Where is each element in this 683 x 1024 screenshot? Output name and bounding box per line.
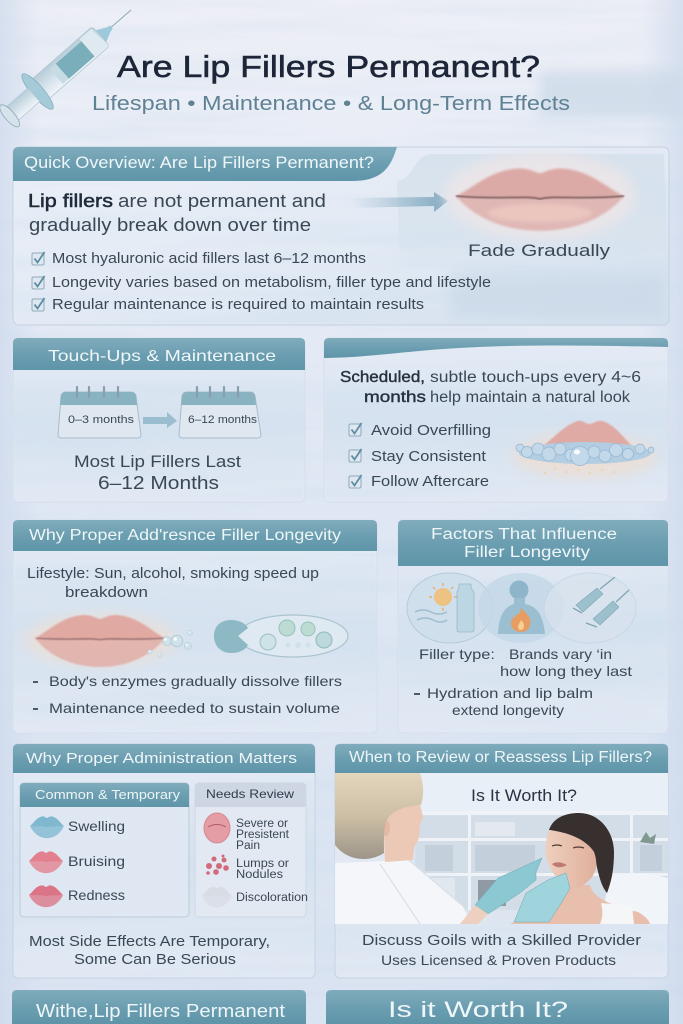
- text: lifestyle: Lifestyle: Sun, alcohol, smoking speed up: [27, 566, 319, 582]
- item: severe pain: Severe or: [236, 818, 288, 830]
- label: fade gradually: Fade Gradually: [468, 241, 611, 260]
- caption: most lip fillers last: Most Lip Fillers Last: [74, 452, 241, 471]
- lead text: Lip fillers: [28, 191, 113, 211]
- sub-panel: needs review: [195, 783, 308, 917]
- nurse: [335, 860, 472, 924]
- image: lips dissolving: [24, 614, 193, 667]
- bullets: enzymes and maintenance: [33, 673, 342, 716]
- checklist: [32, 251, 491, 313]
- heading: quick overview: Quick Overview: Are Lip Fillers Permanent?: [24, 154, 374, 172]
- checklist: touch-up tips: Avoid Overfilling: [371, 423, 491, 439]
- caption: side effects: [29, 934, 270, 968]
- text: scheduled touch-ups: subtle touch-ups every 4~6: [430, 369, 641, 386]
- panel: quick overview: [13, 147, 669, 325]
- panel: proper administration: [13, 744, 315, 978]
- bullets: enzymes and maintenance: Maintenance needed to sustain volume: [49, 700, 340, 716]
- banner: lip fillers permanent: [12, 990, 306, 1024]
- text: hydration: Hydration and lip balm: [427, 685, 593, 701]
- icon: syringes: [544, 573, 636, 643]
- text: lifestyle: breakdown: [65, 585, 148, 601]
- patient: [510, 885, 650, 924]
- image: lips: [444, 152, 636, 240]
- caption: discuss goals: Discuss Goils with a Skilled Provider: [362, 932, 641, 949]
- subtitle: Lifespan • Maintenance • & Long-Term Effects: [92, 92, 570, 115]
- lead text: gradually break down over time: [29, 215, 311, 235]
- checklist: touch-up tips: [349, 423, 491, 490]
- heading: proper administration: [13, 744, 315, 773]
- gloves: [475, 858, 542, 914]
- caption: most lip fillers last: [74, 452, 241, 493]
- heading: touch-ups: [13, 338, 305, 370]
- lead text: [28, 191, 326, 235]
- text: scheduled touch-ups: [340, 369, 641, 406]
- icon: calendar 0-3 months: [58, 387, 141, 438]
- checklist: Regular maintenance is required to maintain results: [52, 297, 424, 313]
- heading: factors: Filler Longevity: [464, 544, 590, 561]
- icon: syringe: [0, 0, 146, 136]
- heading: quick overview: [13, 147, 397, 181]
- label: is it worth it: Is It Worth It?: [471, 786, 577, 805]
- text: filler type: how long they last: [500, 663, 632, 679]
- heading: when to review: When to Review or Reassess Lip Fillers?: [349, 749, 652, 766]
- item: discoloration: Discoloration: [236, 892, 308, 904]
- text: filler type: Brands vary ‘in: [509, 646, 612, 662]
- item: swelling: [30, 816, 125, 838]
- lead text: are not permanent and: [118, 191, 326, 211]
- bullets: enzymes and maintenance: Body's enzymes gradually dissolve fillers: [49, 673, 342, 689]
- arrow: calendar progression: [143, 412, 177, 428]
- heading: factors: Factors That Influence: [431, 526, 617, 543]
- panel: filler breakdown: [13, 520, 377, 733]
- arrow: [350, 192, 448, 212]
- text: filler type: Filler type:: [419, 646, 495, 662]
- sub-panel: needs review: Needs Review: [206, 787, 294, 801]
- item: redness: Redness: [68, 887, 125, 903]
- item: swelling: Swelling: [68, 818, 125, 834]
- checklist: touch-up tips: Stay Consistent: [371, 449, 486, 465]
- checklist: touch-up tips: Follow Aftercare: [371, 474, 489, 490]
- item: redness: [29, 885, 125, 907]
- banner: is it worth it: [326, 990, 669, 1024]
- icon: calendar 0-3 months: 0–3 months: [68, 414, 135, 426]
- item: bruising: [29, 851, 125, 873]
- banner: lip fillers permanent: Withe,Lip Fillers Permanent: [36, 1001, 285, 1021]
- icon: enzyme and filler capsule: [214, 615, 348, 657]
- caption: side effects: Some Can Be Serious: [74, 952, 236, 968]
- heading: proper administration: Why Proper Administration Matters: [26, 750, 297, 767]
- caption: side effects: Most Side Effects Are Temporary,: [29, 934, 270, 950]
- panel: factors: [398, 520, 668, 733]
- photo: provider examining patient: [335, 773, 668, 924]
- item: bruising: Bruising: [68, 853, 125, 869]
- item: severe pain: [204, 813, 290, 852]
- text: filler type: [419, 646, 632, 679]
- banner: is it worth it: Is it Worth It?: [388, 997, 568, 1022]
- caption: most lip fillers last: 6–12 Months: [98, 473, 219, 493]
- heading: filler longevity: Why Proper Add'resnce Filler Longevity: [29, 527, 341, 544]
- sub-panel: common and temporary: [20, 783, 189, 917]
- heading: filler longevity: [13, 520, 377, 551]
- text: scheduled touch-ups: months: [364, 389, 426, 406]
- decorative wave header: [324, 338, 668, 358]
- panel: scheduled touch-ups: [324, 338, 668, 502]
- panel: touch-ups and maintenance: [13, 338, 305, 502]
- icon: calendar 6-12 months: 6–12 months: [188, 414, 258, 426]
- item: severe pain: Pain: [236, 840, 260, 852]
- heading: when to review: [335, 744, 668, 773]
- panel: when to review: [335, 744, 668, 978]
- text: hydration: [414, 685, 593, 718]
- item: lumps: Lumps or: [236, 858, 289, 870]
- item: lumps: Nodules: [236, 869, 283, 881]
- icon: calendar 6-12 months: [179, 387, 261, 438]
- text: hydration: extend longevity: [452, 702, 564, 718]
- title: Are Lip Fillers Permanent?: [117, 49, 540, 84]
- item: severe pain: Presistent: [236, 829, 290, 841]
- icon: body with flame: [478, 573, 564, 643]
- image: lips with filler bubbles: [513, 421, 657, 478]
- heading: factors: [398, 520, 668, 566]
- heading: touch-ups: Touch-Ups & Maintenance: [48, 348, 276, 365]
- text: scheduled touch-ups: help maintain a natural look: [430, 389, 630, 406]
- caption: discuss goals: [362, 932, 641, 968]
- sub-panel: common and temporary: Common & Temporary: [35, 788, 181, 802]
- checklist: Most hyaluronic acid fillers last 6–12 months: [52, 251, 366, 267]
- text: lifestyle: [27, 566, 319, 601]
- icon: sun and water bottle: [407, 573, 493, 643]
- text: scheduled touch-ups: Scheduled,: [340, 369, 425, 386]
- caption: discuss goals: Uses Licensed & Proven Products: [381, 952, 616, 968]
- item: lumps: [206, 854, 289, 881]
- checklist: Longevity varies based on metabolism, filler type and lifestyle: [52, 275, 491, 291]
